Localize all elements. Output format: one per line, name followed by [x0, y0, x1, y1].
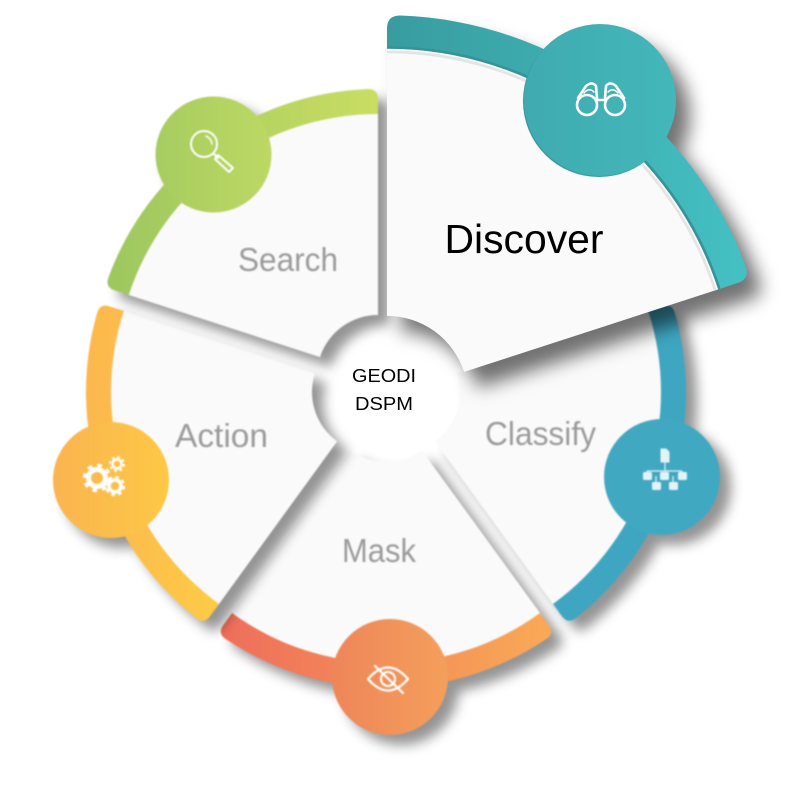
heading: Discover: Discover [444, 216, 604, 262]
icon: gears [84, 457, 124, 495]
center label: GEODI DSPM: GEODI [352, 365, 416, 386]
heading: Search: Search [238, 241, 338, 278]
heading: Mask: Mask [342, 532, 416, 569]
panel: Discover (highlighted) [387, 16, 747, 372]
icon: binoculars [577, 84, 625, 115]
center circle [318, 320, 462, 464]
icon: crossed-out eye [368, 666, 408, 693]
heading: Action: Action [175, 417, 268, 454]
center label: GEODI DSPM: DSPM [355, 393, 413, 414]
panel: Search [105, 30, 444, 370]
panel: Action [0, 248, 362, 624]
panel: Classify [417, 303, 755, 643]
panel: Mask [178, 416, 555, 792]
icon: document hierarchy [643, 449, 687, 490]
heading: Classify: Classify [485, 415, 596, 452]
icon: magnifying glass [191, 131, 233, 172]
center label: GEODI DSPM [352, 365, 416, 414]
